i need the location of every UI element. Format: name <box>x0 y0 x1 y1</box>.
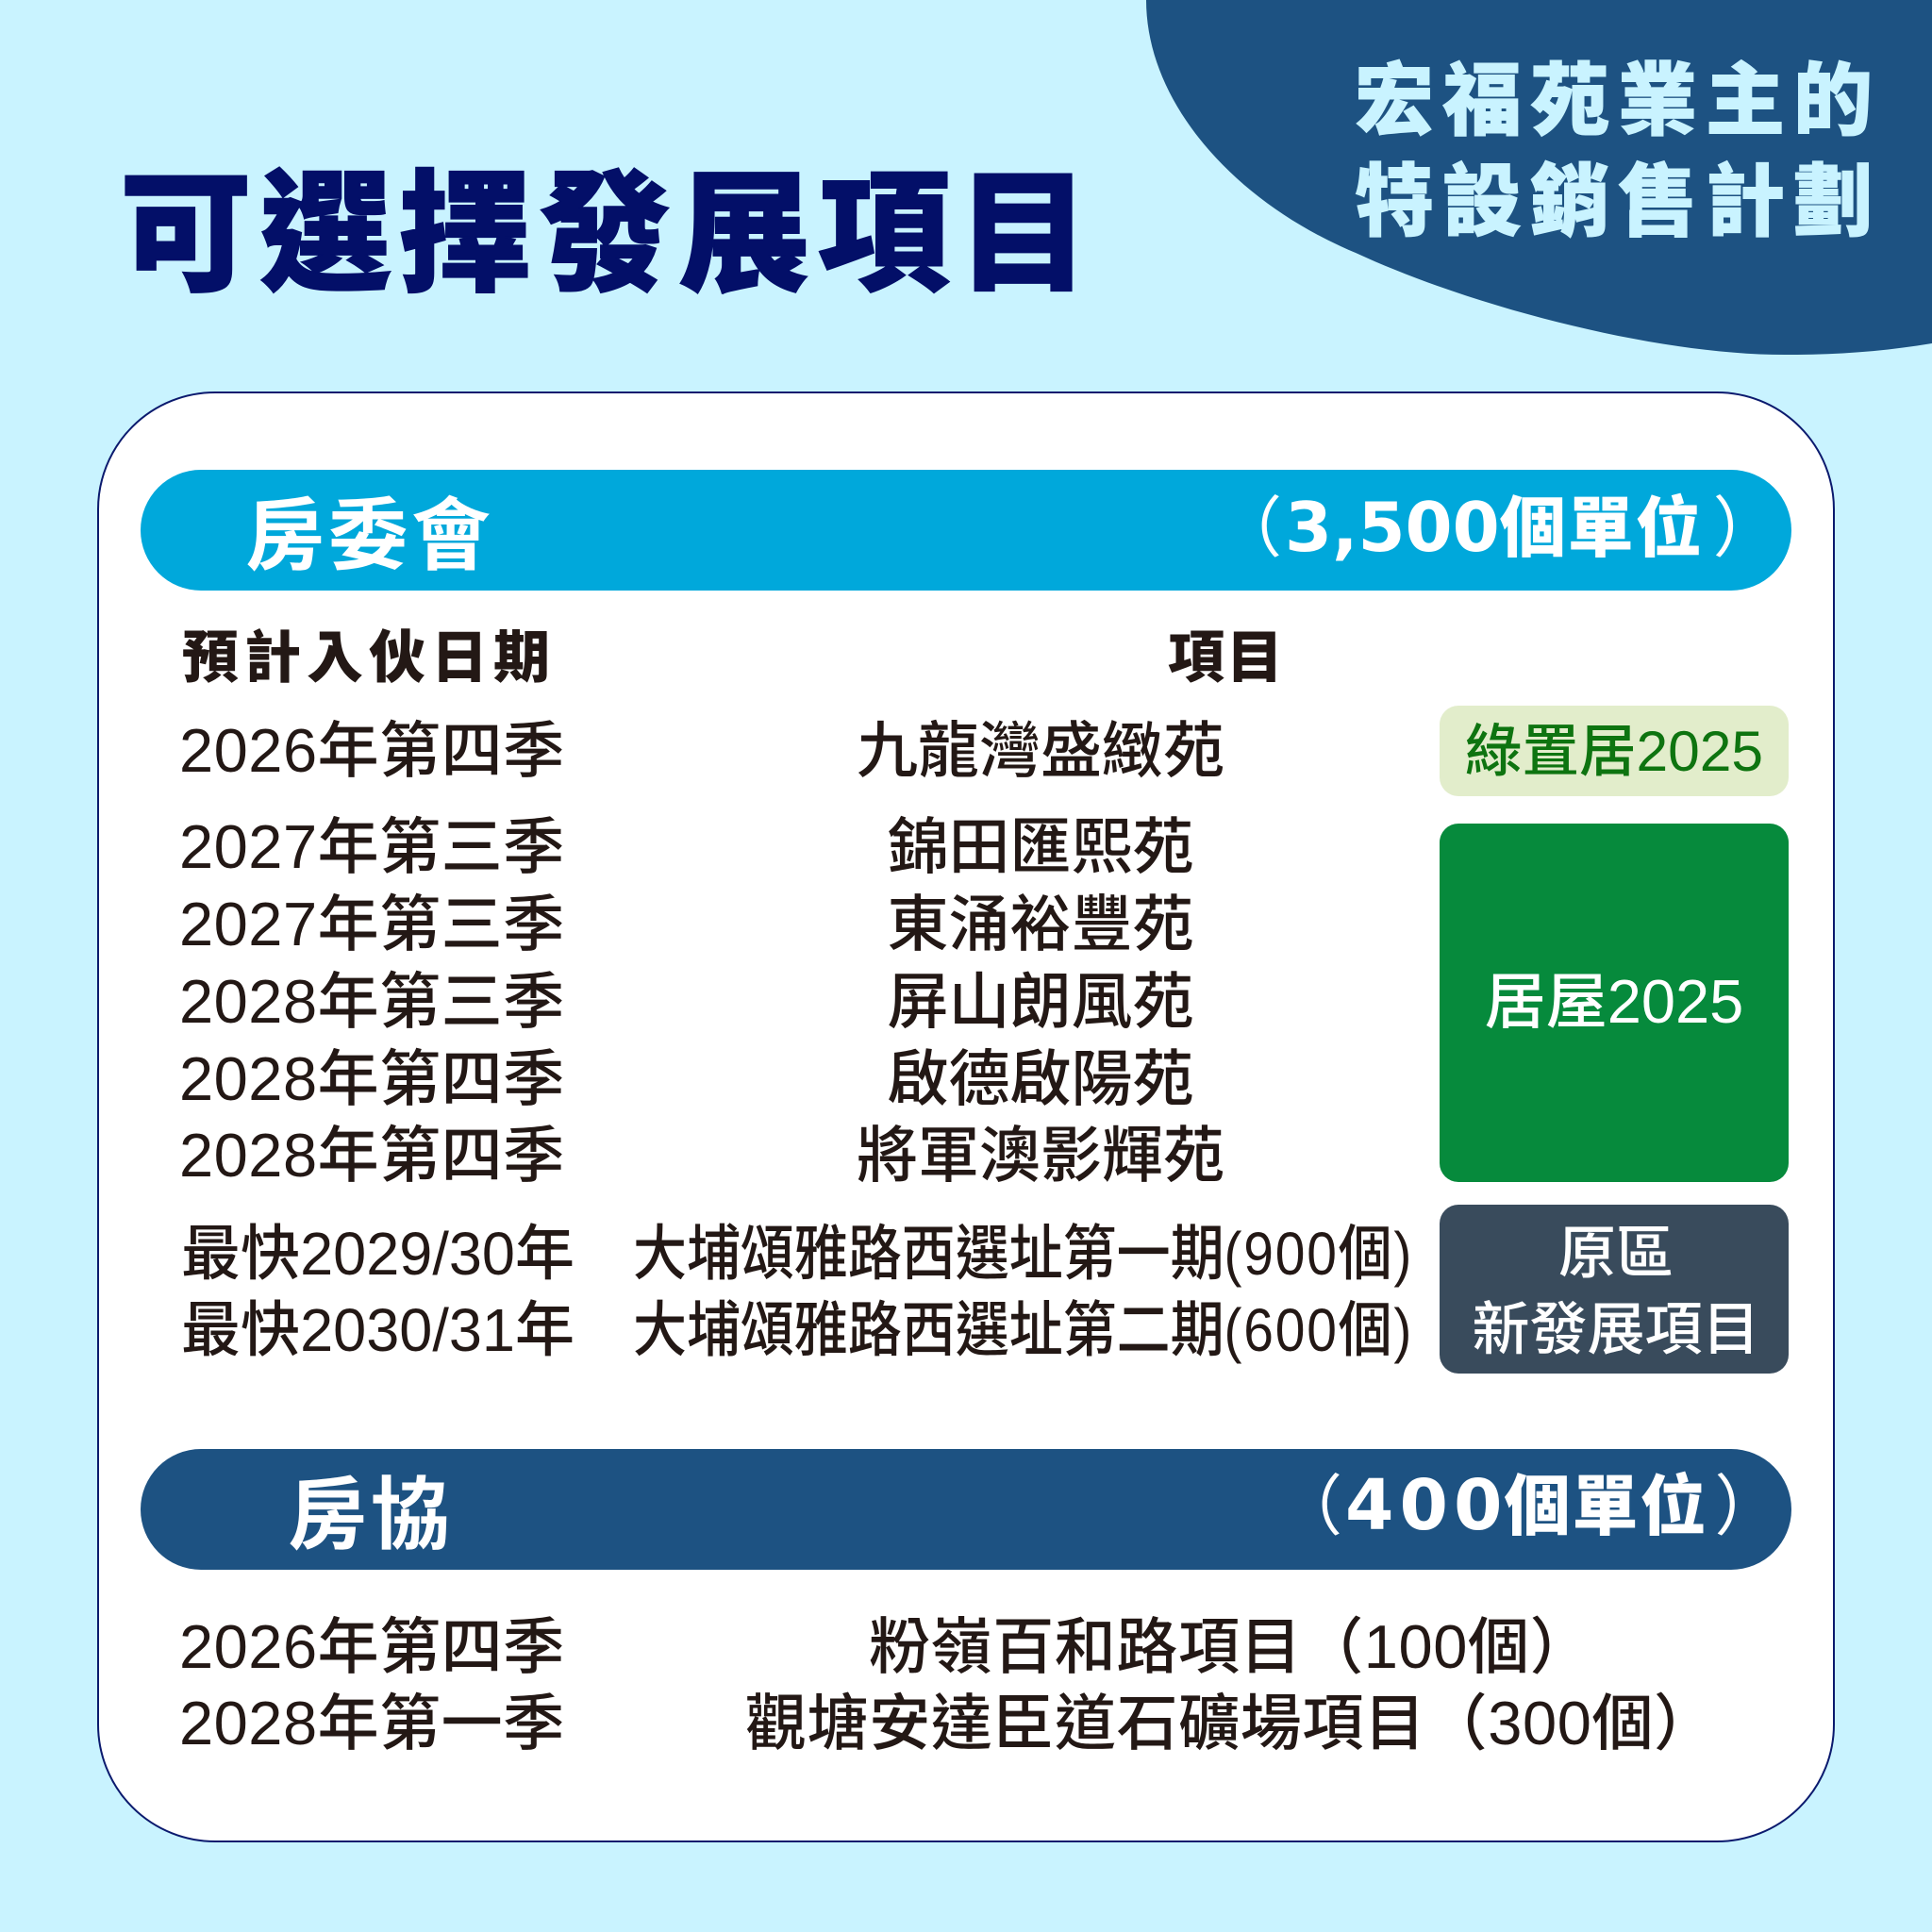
panel: main <box>97 391 1835 1842</box>
row project: 九龍灣盛緻苑 <box>857 716 1224 785</box>
row date: 2028年第四季 <box>179 1044 565 1113</box>
row date: 最快2030/31年 <box>181 1296 575 1364</box>
header bar: 房委會 <box>141 470 1791 591</box>
row date: 2027年第三季 <box>179 890 565 958</box>
row project: 錦田匯熙苑 <box>887 812 1194 881</box>
title: 可選擇發展項目 <box>120 160 1097 308</box>
row project: 將軍澳影輝苑 <box>857 1121 1224 1190</box>
row project: 大埔頌雅路西選址第二期(600個) <box>633 1296 1413 1364</box>
tag: 居屋2025 <box>1440 824 1789 1182</box>
row project: 觀塘安達臣道石礦場項目（300個） <box>745 1689 1716 1757</box>
row date: 2028年第三季 <box>179 967 565 1036</box>
row date: 2026年第四季 <box>179 716 565 785</box>
column head: date: 預計入伙日期 <box>182 626 556 690</box>
bar label: 房協: 房協 <box>288 1471 454 1559</box>
corner blob <box>1146 0 1932 355</box>
row date: 2028年第一季 <box>179 1689 565 1757</box>
tag: 原區新發展項目 <box>1440 1205 1789 1374</box>
tag text: 居屋2025 <box>1485 967 1743 1036</box>
row date: 2026年第四季 <box>179 1612 565 1681</box>
row project: 啟德啟陽苑 <box>887 1044 1194 1113</box>
row date: 2027年第三季 <box>179 812 565 881</box>
tag text: 綠置居2025 <box>1465 719 1763 783</box>
corner heading: 特設銷售計劃 <box>1355 158 1881 246</box>
tag text: 原區 <box>1558 1221 1674 1285</box>
bar label: 房委會: 房委會 <box>245 491 494 580</box>
row project: 大埔頌雅路西選址第一期(900個) <box>633 1220 1413 1288</box>
bar count: 3,500: （3,500個單位） <box>1216 488 1779 567</box>
tag: 綠置居2025 <box>1440 706 1789 796</box>
row date: 最快2029/30年 <box>181 1220 575 1288</box>
corner heading <box>1355 57 1881 246</box>
row date: 2028年第四季 <box>179 1121 565 1190</box>
corner heading: 宏福苑業主的 <box>1355 57 1881 145</box>
header bar: 房協 <box>141 1449 1791 1570</box>
column head: project: 項目 <box>1168 626 1285 690</box>
row project: 屏山朗風苑 <box>887 967 1194 1036</box>
tag text: 新發展項目 <box>1472 1297 1760 1361</box>
row project: 粉嶺百和路項目（100個） <box>869 1612 1591 1681</box>
row project: 東涌裕豐苑 <box>887 890 1194 958</box>
bar count: 400: （400個單位） <box>1276 1465 1780 1546</box>
